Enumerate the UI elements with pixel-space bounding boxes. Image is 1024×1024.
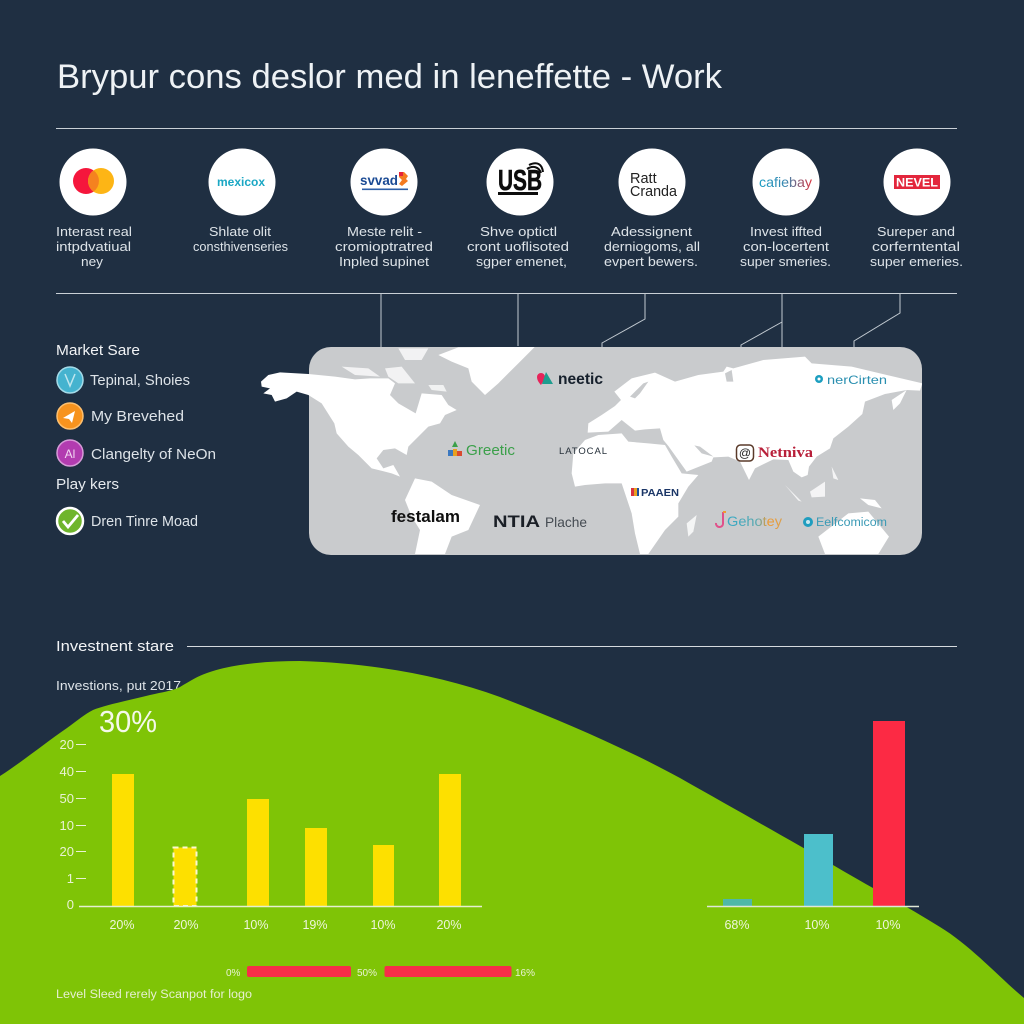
y axis labels: 20 <box>60 737 74 752</box>
africa, eurasia and australia <box>572 357 922 554</box>
world map <box>261 347 922 555</box>
x axis labels: 10% <box>370 918 396 932</box>
legend item: purple: Clangelty of NeOn <box>91 447 216 463</box>
caption 5: Adessignent <box>611 224 692 239</box>
map panel <box>309 347 922 555</box>
x axis labels: 19% <box>302 918 328 932</box>
caption 2: consthivenseries <box>193 239 288 254</box>
x axis labels: 20% <box>173 918 199 932</box>
logo: mexicox <box>208 148 276 216</box>
range bars: 50% <box>357 968 377 979</box>
captions under logos <box>56 224 963 269</box>
logo: Ratt Cranda: Cranda <box>630 184 678 200</box>
x axis labels: 10% <box>243 918 269 932</box>
logo: mexicox: mexicox <box>217 177 266 189</box>
caption 1 <box>56 224 132 269</box>
legend item: purple <box>57 440 216 466</box>
y axis labels <box>60 737 74 912</box>
caption 6: con-locertent <box>743 239 829 254</box>
logo: cafiebay: cafiebay <box>759 174 812 190</box>
caption 7: corferntental <box>872 239 960 254</box>
logo: NEVEL: NEVEL <box>896 176 938 190</box>
caption 3: Inpled supinet <box>339 254 429 269</box>
x axis labels: 20% <box>109 918 135 932</box>
land masses <box>261 347 922 554</box>
big stat: 30% <box>99 704 157 739</box>
caption 3 <box>335 224 433 269</box>
panel: logo row <box>60 148 950 216</box>
bar chart: teal and red: 10% <box>875 918 901 932</box>
map label: Gehotey <box>716 512 782 529</box>
caption 6 <box>740 224 831 269</box>
map label: neetic: neetic <box>558 371 603 388</box>
legend heading: play kers: Play kers <box>56 477 119 493</box>
logo: Ratt Cranda: Ratt <box>630 171 657 187</box>
map label: nerCirten: nerCirten <box>827 373 887 387</box>
range bars: 0% <box>226 968 241 979</box>
bar chart: teal and red: 10% <box>804 918 830 932</box>
title: Brypur cons deslor med in leneffette - Work <box>57 58 723 96</box>
x axis labels: 20% <box>436 918 462 932</box>
caption 1: Interast real <box>56 224 132 239</box>
caption 7 <box>870 224 963 269</box>
map label: neetic <box>537 371 603 388</box>
logo: two overlapping circles <box>60 148 126 216</box>
caption 6: super smeries. <box>740 254 831 269</box>
map label: Greetic <box>448 441 515 459</box>
legend item: teal <box>57 367 190 393</box>
bar chart: teal and red <box>707 721 919 932</box>
caption 4: cront uoflisoted <box>467 239 569 254</box>
bar chart: yellow <box>60 737 482 932</box>
map label: NTIA Plache <box>493 512 587 531</box>
map label: festalam: festalam <box>391 507 460 526</box>
y axis labels: 10 <box>60 818 74 833</box>
y axis labels: 20 <box>60 844 74 859</box>
caption 1: ney <box>81 254 104 269</box>
map label: Gehotey: Gehotey <box>727 514 782 529</box>
map label: Netniva: @ <box>739 446 751 460</box>
caption 3: cromioptratred <box>335 239 433 254</box>
caption 5: derniogoms, all <box>604 239 700 254</box>
footnote: Level Sleed rerely Scanpot for logo <box>56 989 252 1001</box>
caption 5: evpert bewers. <box>604 254 698 269</box>
bars <box>112 774 461 906</box>
y axis labels: 1 <box>67 871 74 886</box>
legend item: purple: Al <box>65 447 75 461</box>
caption 4 <box>467 224 569 269</box>
map label: LATOCAL: LATOCAL <box>559 446 607 457</box>
map label: nerCirten <box>815 373 887 387</box>
x axis labels <box>109 918 462 932</box>
caption 7: super emeries. <box>870 254 963 269</box>
logo: USB <box>486 148 554 216</box>
map label: Greetic: Greetic <box>466 442 515 459</box>
caption 4: Shve optictl <box>480 224 557 239</box>
caption 2: Shlate olit <box>209 224 271 239</box>
logo: svvad <box>350 148 418 216</box>
map label: Netniva: Netniva <box>758 445 814 461</box>
map label: PAAEN: PAAEN <box>641 487 679 499</box>
logo: svvad: svvad <box>360 172 398 188</box>
logo: USB: USB <box>498 165 542 197</box>
subheading: Investions, put 2017 <box>56 678 181 693</box>
legend item: teal: Tepinal, Shoies <box>90 373 190 389</box>
caption 7: Sureper and <box>877 224 955 239</box>
legend heading: market share: Market Sare <box>56 343 140 359</box>
americas and greenland <box>261 347 535 554</box>
range bars <box>226 966 535 979</box>
range bars: 16% <box>515 968 535 979</box>
logo: Ratt Cranda <box>618 148 686 216</box>
map label: Netniva <box>736 445 814 461</box>
y axis labels: 50 <box>60 791 74 806</box>
caption 3: Meste relit - <box>347 224 422 239</box>
map label: NTIA Plache: Plache <box>545 514 587 530</box>
caption 1: intpdvatiual <box>56 239 131 254</box>
legend item: orange: My Brevehed <box>91 409 184 425</box>
map label: NTIA Plache: NTIA <box>493 512 540 531</box>
y axis labels: 0 <box>67 897 74 912</box>
legend item: green check <box>57 508 198 534</box>
y axis labels: 40 <box>60 764 74 779</box>
map label: Eelfcomicom: Eelfcomicom <box>816 517 887 529</box>
caption 5 <box>604 224 700 269</box>
legend item: green check: Dren Tinre Moad <box>91 514 198 530</box>
heading: investment share: Investnent stare <box>56 639 174 655</box>
green hill background <box>0 661 1024 1024</box>
logo: cafiebay <box>752 148 820 216</box>
panel: legend <box>56 343 216 534</box>
legend item: orange <box>57 403 184 429</box>
connector lines <box>381 293 900 356</box>
bar chart: teal and red: 68% <box>724 918 750 932</box>
caption 2 <box>193 224 288 254</box>
caption 4: sgper emenet, <box>476 254 567 269</box>
logo: NEVEL <box>884 148 950 216</box>
caption 6: Invest iffted <box>750 224 822 239</box>
